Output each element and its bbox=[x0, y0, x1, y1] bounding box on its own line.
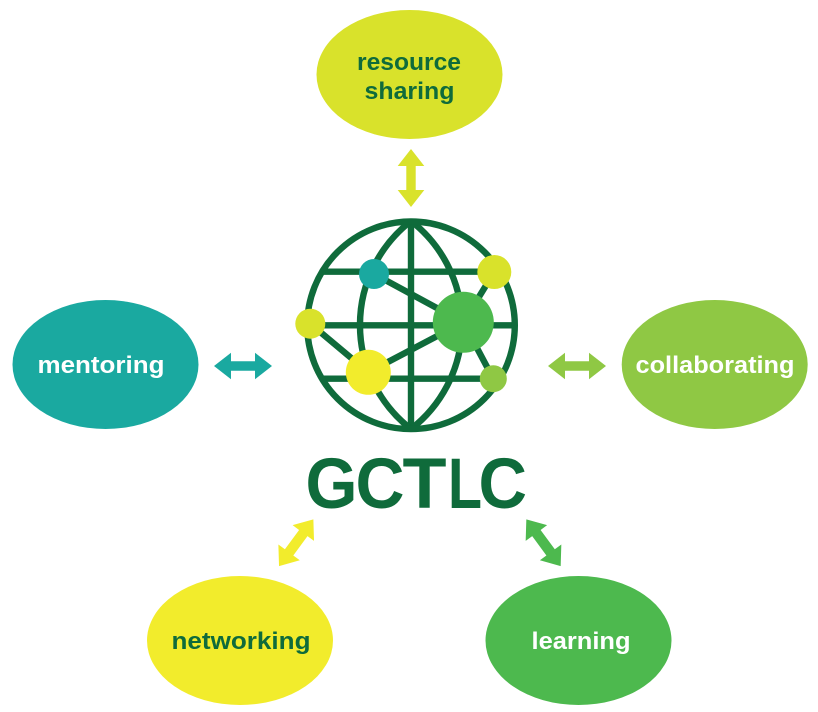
node: learning: learning bbox=[532, 628, 630, 655]
arrow: resource sharing to globe bbox=[398, 149, 424, 207]
node: mentoring bbox=[12, 300, 198, 429]
globe node: lime left bbox=[295, 309, 325, 339]
globe node: large green bbox=[433, 292, 494, 353]
node: resource sharing: resource bbox=[357, 49, 461, 76]
node: resource sharing: sharing bbox=[364, 78, 454, 105]
title: T bbox=[402, 445, 446, 524]
globe node: lime top right bbox=[477, 255, 511, 289]
arrow: learning to globe bbox=[516, 511, 571, 574]
globe node: yellow bbox=[346, 350, 391, 395]
arrow: collaborating to globe bbox=[548, 353, 606, 379]
title: L bbox=[448, 445, 482, 524]
icon: network globe bbox=[295, 221, 515, 429]
node: resource sharing bbox=[316, 10, 502, 139]
node: networking bbox=[147, 576, 333, 705]
node: collaborating bbox=[622, 300, 808, 429]
arrow: networking to globe bbox=[268, 511, 324, 574]
node: learning bbox=[486, 576, 672, 705]
title: G bbox=[306, 445, 358, 524]
globe node: teal bbox=[359, 259, 389, 289]
arrow: mentoring to globe bbox=[214, 353, 272, 379]
node: collaborating: collaborating bbox=[636, 352, 794, 379]
title: C bbox=[356, 445, 404, 524]
title: C bbox=[478, 445, 527, 524]
globe node: light green bbox=[480, 365, 507, 392]
node: networking: networking bbox=[172, 628, 310, 655]
title bbox=[306, 445, 527, 524]
node: mentoring: mentoring bbox=[38, 352, 164, 379]
